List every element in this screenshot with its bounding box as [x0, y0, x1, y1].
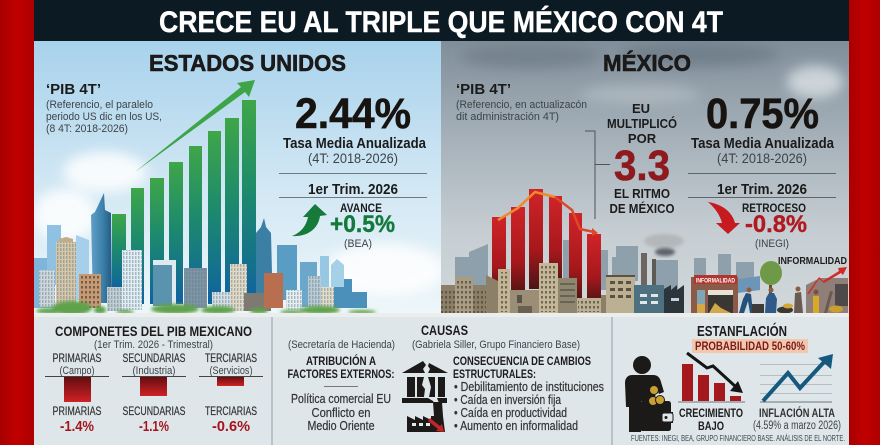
bar: secundarias: SECUNDARIAS: [122, 353, 186, 365]
text: external factors: FACTORES EXTERNOS:: [288, 367, 394, 381]
bar chart: crecimiento bajo: BAJO: [698, 419, 724, 433]
text: external factors: Política comercial EU: [291, 392, 391, 406]
bar: terciarias: TERCIARIAS: [205, 353, 257, 365]
storm clouds: [460, 42, 843, 105]
divider lines: [279, 174, 427, 198]
stat: 2.44%: 2.44%: [295, 90, 411, 138]
heading: MÉXICO: [603, 49, 691, 76]
sources: (Secretaría de Hacienda): [288, 339, 395, 351]
stat: 0.75%: [691, 90, 835, 166]
divider lines: [688, 174, 836, 198]
text: PIB 4T note: ‘PIB 4T’: [46, 81, 101, 98]
bar: secundarias: (Industria): [132, 365, 176, 377]
text: PIB 4T note: [46, 81, 162, 135]
text: structural consequences: • Debilitamiento de instituciones: [454, 380, 604, 394]
sources: [288, 339, 580, 351]
icon: up arrow: [292, 204, 327, 236]
bar: secundarias: SECUNDARIAS: [122, 406, 186, 418]
text: PIB 4T note: ‘PIB 4T’: [456, 81, 511, 98]
line chart: inflación alta: [753, 354, 841, 432]
bar: primarias: PRIMARIAS: [52, 406, 102, 418]
line chart: inflación alta: INFLACIÓN ALTA: [759, 405, 835, 420]
skyline back: [455, 240, 754, 290]
title bar: [34, 0, 849, 41]
heading: ESTADOS UNIDOS: [149, 50, 346, 76]
bar chart: crecimiento bajo: [678, 353, 745, 433]
bar: primarias: (Campo): [60, 365, 94, 377]
icon: informal market scene: [691, 261, 848, 314]
bar: terciarias: TERCIARIAS: [205, 406, 257, 418]
panel separators: [34, 317, 849, 445]
stat: 2.44%: Tasa Media Anualizada: [283, 135, 427, 152]
heading: CAUSAS: [421, 323, 468, 338]
label: 1er Trim. 2026: 1er Trim. 2026: [717, 181, 807, 198]
stat: 0.75%: 0.75%: [706, 90, 819, 138]
text: PIB 4T note: (Referencio, el paralelo: [46, 99, 153, 111]
low-rise city: [441, 263, 635, 313]
text: structural consequences: • Caída en productividad: [454, 406, 567, 420]
text: external factors: Medio Oriente: [308, 419, 375, 433]
icon: person with wallet: [625, 356, 673, 432]
icon: informal market scene: INFORMALIDAD: [696, 278, 735, 284]
panel: estanflación: [613, 317, 849, 445]
stat: 0.75%: (4T: 2018-2026): [717, 151, 807, 166]
icon: cracked institution and factory: [402, 361, 448, 432]
stat: multiplier: MULTIPLICÓ: [607, 116, 677, 131]
clouds: [33, 152, 445, 296]
bracket: [585, 131, 610, 219]
text: PIB 4T note: dit administración 4T): [456, 111, 559, 123]
icon: factories with smoke: [634, 234, 684, 313]
bar: terciarias: -0.6%: [212, 418, 250, 435]
stat: 2.44%: (4T: 2018-2026): [308, 151, 398, 166]
stat: retreat: RETROCESO: [742, 203, 806, 215]
label: informalidad: INFORMALIDAD: [778, 255, 847, 267]
heading: (1er Trim. 2026 - Trimestral): [94, 339, 213, 351]
line chart: inflación alta: (4.59% a marzo 2026): [753, 420, 841, 432]
text: structural consequences: ESTRUCTURALES:: [453, 367, 536, 381]
title bar: CRECE EU AL TRIPLE QUE MÉXICO CON 4T: [159, 5, 723, 39]
text: external factors: [288, 353, 394, 433]
bar: primarias: -1.4%: [60, 418, 94, 435]
bar: terciarias: (Servicios): [210, 365, 252, 377]
bar chart: rising GDP: [112, 100, 256, 304]
bar: secundarias: [122, 353, 186, 435]
bar: primarias: PRIMARIAS: [52, 353, 102, 365]
bar: primarias: [45, 353, 109, 435]
stat: multiplier: DE MÉXICO: [610, 201, 674, 216]
bar: terciarias: [199, 353, 263, 435]
text: PIB 4T note: periodo US dic en los US,: [46, 111, 162, 123]
stat: advance: [330, 203, 395, 250]
heading: COMPONETES DEL PIB MEXICANO: [55, 324, 252, 339]
panel: México: [441, 41, 849, 315]
stat: retreat: [742, 203, 807, 250]
icon: down arrow: [708, 202, 740, 234]
heading: ESTANFLACIÓN: [697, 322, 787, 340]
text: PIB 4T note: (8 4T: 2018-2026): [46, 123, 128, 135]
stat: advance: AVANCE: [340, 203, 382, 215]
stat: multiplier: EU: [632, 101, 650, 116]
stat: multiplier: [607, 101, 677, 216]
text: PIB 4T note: [456, 81, 587, 123]
arrow: growth trend: [135, 80, 255, 172]
stat: retreat: -0.8%: [745, 211, 807, 238]
bar: secundarias: -1.1%: [139, 418, 169, 435]
badge: probabilidad: PROBABILIDAD 50-60%: [695, 339, 805, 353]
stat: advance: (BEA): [344, 238, 372, 250]
stat: multiplier: EL RITMO: [614, 186, 670, 201]
stat: 0.75%: Tasa Media Anualizada: [691, 135, 835, 152]
text: structural consequences: [453, 354, 604, 433]
sources: (Gabriela Siller, Grupo Financiero Base): [412, 339, 580, 351]
stat: advance: +0.5%: [330, 211, 395, 238]
text: structural consequences: • Aumento en informalidad: [454, 419, 578, 433]
text: structural consequences: CONSECUENCIA DE CAMBIOS: [453, 354, 591, 368]
white strip under panels: [34, 313, 849, 317]
label: 1er Trim. 2026: 1er Trim. 2026: [308, 181, 398, 198]
trees: [36, 301, 376, 315]
bar chart: crecimiento bajo: CRECIMIENTO: [679, 406, 743, 420]
stat: retreat: (INEGI): [755, 238, 789, 250]
panel: causas: [273, 317, 611, 445]
text: external factors: Conflicto en: [312, 406, 371, 420]
bar chart: falling GDP: [492, 189, 601, 304]
panel: Estados Unidos: [33, 41, 445, 315]
arrow: decline trend: [498, 192, 598, 236]
heading: [55, 324, 252, 351]
skyline front: [39, 193, 334, 311]
stat: 2.44%: [283, 90, 427, 166]
text: PIB 4T note: (Referencio, en actualizacón: [456, 99, 587, 111]
skyline back: [34, 225, 367, 308]
stat: multiplier: POR: [628, 131, 657, 146]
stat: multiplier: 3.3: [614, 142, 670, 190]
text: external factors: ATRIBUCIÓN A: [306, 353, 376, 368]
panel: componentes del PIB: [34, 317, 271, 445]
text: structural consequences: • Caída en inversión fija: [454, 393, 561, 407]
